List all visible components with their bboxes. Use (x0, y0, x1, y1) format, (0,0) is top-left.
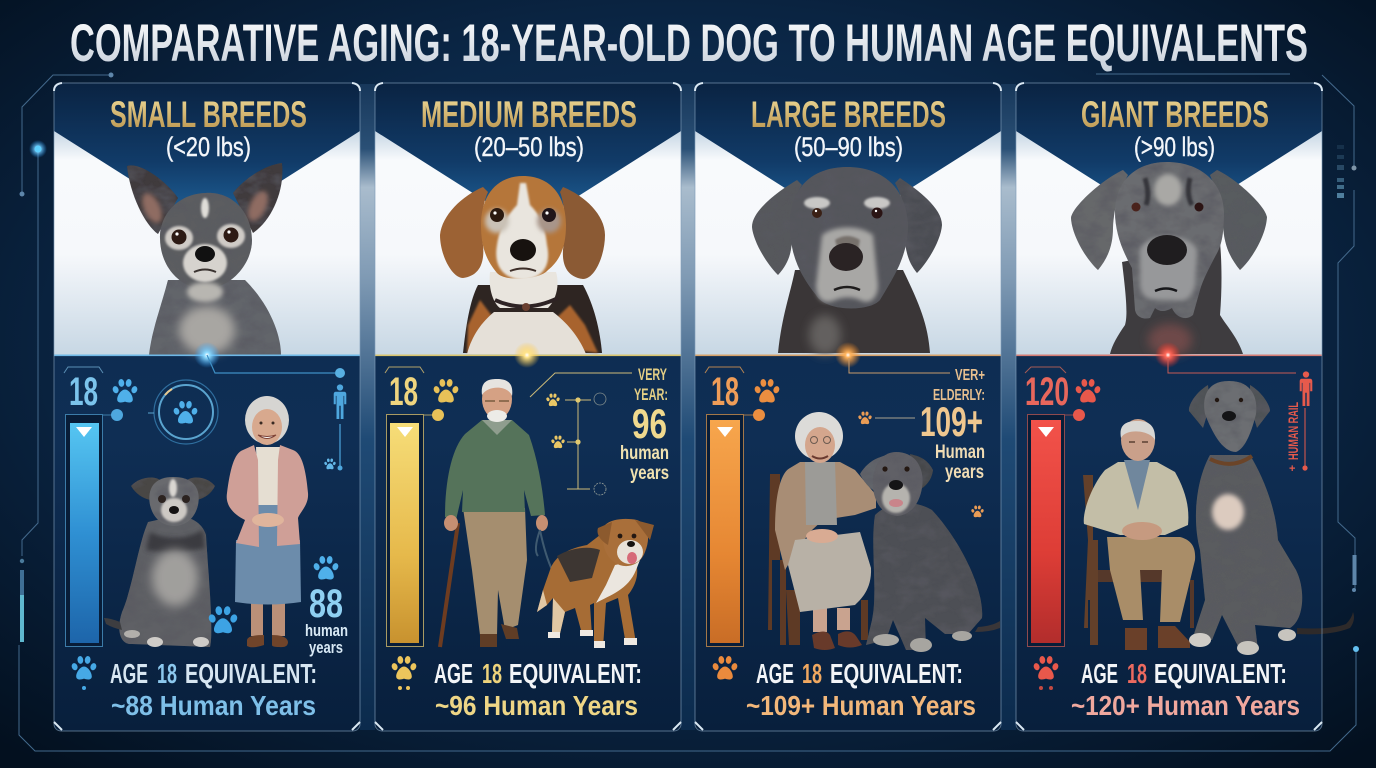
equivalent value: ~109+ Human Years (746, 690, 976, 721)
panel: medium breeds (375, 83, 681, 731)
dog age: 18 (69, 370, 98, 414)
woman: elderly figure (227, 396, 308, 647)
equivalent label (1081, 658, 1287, 689)
panel: giant breeds (1016, 83, 1354, 731)
connector line (530, 373, 632, 397)
human age value: years (309, 638, 343, 657)
human age value: years (945, 462, 984, 483)
status glow (695, 342, 1001, 368)
equivalent label: AGE (1081, 658, 1118, 689)
dog: standing (537, 519, 654, 648)
icon: small paw (324, 458, 336, 469)
equivalent label: 18 (1127, 658, 1147, 689)
callout text: VERY (638, 365, 667, 384)
status glow (375, 342, 681, 368)
dog age: 120 (1025, 370, 1069, 414)
icon: paw (313, 556, 339, 579)
icon: person (334, 384, 346, 419)
equivalent label: 18 (802, 658, 822, 689)
icon: person (1300, 371, 1312, 406)
age bar (66, 409, 123, 646)
human age value (305, 582, 348, 657)
equivalent label (756, 658, 963, 689)
dog age: 18 (711, 370, 739, 414)
human age value: years (630, 463, 669, 484)
equivalent label: EQUIVALENT: (185, 658, 317, 689)
equivalent value: ~88 Human Years (111, 690, 316, 721)
heading: LARGE BREEDS (751, 94, 946, 135)
age bar (706, 409, 765, 646)
man seated (1083, 419, 1195, 650)
equivalent value: ~120+ Human Years (1071, 690, 1300, 721)
timeline with paws (546, 393, 606, 495)
equivalent label: AGE (434, 658, 473, 689)
age number bracket (705, 367, 744, 373)
connector line (849, 358, 950, 373)
rail label: HUMAN RAIL (1285, 402, 1301, 460)
equivalent label (434, 658, 642, 689)
connector line (207, 355, 335, 373)
human age value: human (305, 621, 348, 640)
status glow (1016, 342, 1322, 368)
icon: small paw (971, 505, 984, 517)
equivalent label: 18 (157, 658, 177, 689)
callout text: YEAR: (634, 385, 668, 404)
equivalent label: EQUIVALENT: (1154, 658, 1287, 689)
rail label: + (1289, 463, 1295, 475)
dog: sitting labrador (860, 452, 1000, 652)
human age value: 88 (309, 582, 343, 626)
status glow (54, 342, 360, 368)
weight range: (20–50 lbs) (474, 132, 584, 162)
icon: paw (1075, 379, 1101, 402)
weight range: (>90 lbs) (1134, 132, 1215, 162)
icon: paw (208, 606, 238, 633)
heading: GIANT BREEDS (1081, 94, 1269, 135)
human age value: 109+ (920, 398, 983, 445)
equivalent label: 18 (482, 658, 502, 689)
photo backdrop (375, 131, 681, 355)
paw with connector (858, 411, 915, 424)
callout text: ELDERLY: (933, 387, 985, 404)
equivalent value: ~96 Human Years (435, 690, 638, 721)
dog age: 18 (389, 370, 418, 414)
leash (536, 530, 553, 572)
icon: paw (433, 379, 459, 402)
human age value (620, 400, 669, 484)
panel frames (54, 83, 1322, 731)
dog: sitting senior (104, 477, 215, 647)
icon: paw ring (148, 380, 218, 444)
icon: paw with dots (1033, 656, 1059, 690)
woman seated (768, 412, 876, 650)
age number bracket (385, 367, 424, 373)
equivalent label: AGE (756, 658, 794, 689)
photo backdrop (695, 131, 1001, 355)
human age value: Human (935, 442, 985, 463)
equivalent label: AGE (110, 658, 148, 689)
heading: MEDIUM BREEDS (421, 94, 637, 135)
human age value: human (620, 443, 669, 464)
equivalent label (110, 658, 317, 689)
dog portrait: labrador (752, 167, 942, 355)
age number bracket (1025, 367, 1066, 373)
icon: paw with dots (391, 656, 417, 690)
icon: paw (112, 379, 138, 402)
connector line (1168, 358, 1296, 373)
heading: SMALL BREEDS (110, 94, 307, 135)
age bar (386, 409, 444, 646)
human age value: 96 (632, 400, 667, 447)
dog: sitting great dane (1189, 381, 1354, 655)
left side gauge (20, 559, 24, 642)
divider strips (360, 84, 1016, 730)
equivalent label: EQUIVALENT: (830, 658, 963, 689)
age bar (1028, 409, 1085, 646)
callout text (933, 367, 985, 404)
weight range: (50–90 lbs) (794, 132, 903, 162)
dog portrait: chihuahua (127, 163, 282, 355)
icon: paw with dot (71, 656, 97, 690)
photo backdrop (1016, 131, 1322, 355)
icon: paw (712, 656, 738, 679)
glow node right (1353, 646, 1359, 652)
weight range: (<20 lbs) (166, 132, 251, 162)
dog portrait: great dane (1071, 162, 1267, 356)
dog portrait: beagle (440, 176, 605, 354)
man with cane (440, 379, 548, 647)
callout text (634, 365, 668, 404)
rail label (1285, 402, 1308, 475)
equivalent label: EQUIVALENT: (509, 658, 642, 689)
glow node left (29, 140, 47, 158)
photo backdrop (54, 131, 360, 355)
icon: paw (754, 379, 780, 402)
age number bracket (64, 367, 103, 373)
callout text: VER+ (955, 367, 985, 384)
panel: large breeds (695, 83, 1001, 731)
human age value (920, 398, 985, 483)
panel: small breeds (54, 83, 360, 731)
